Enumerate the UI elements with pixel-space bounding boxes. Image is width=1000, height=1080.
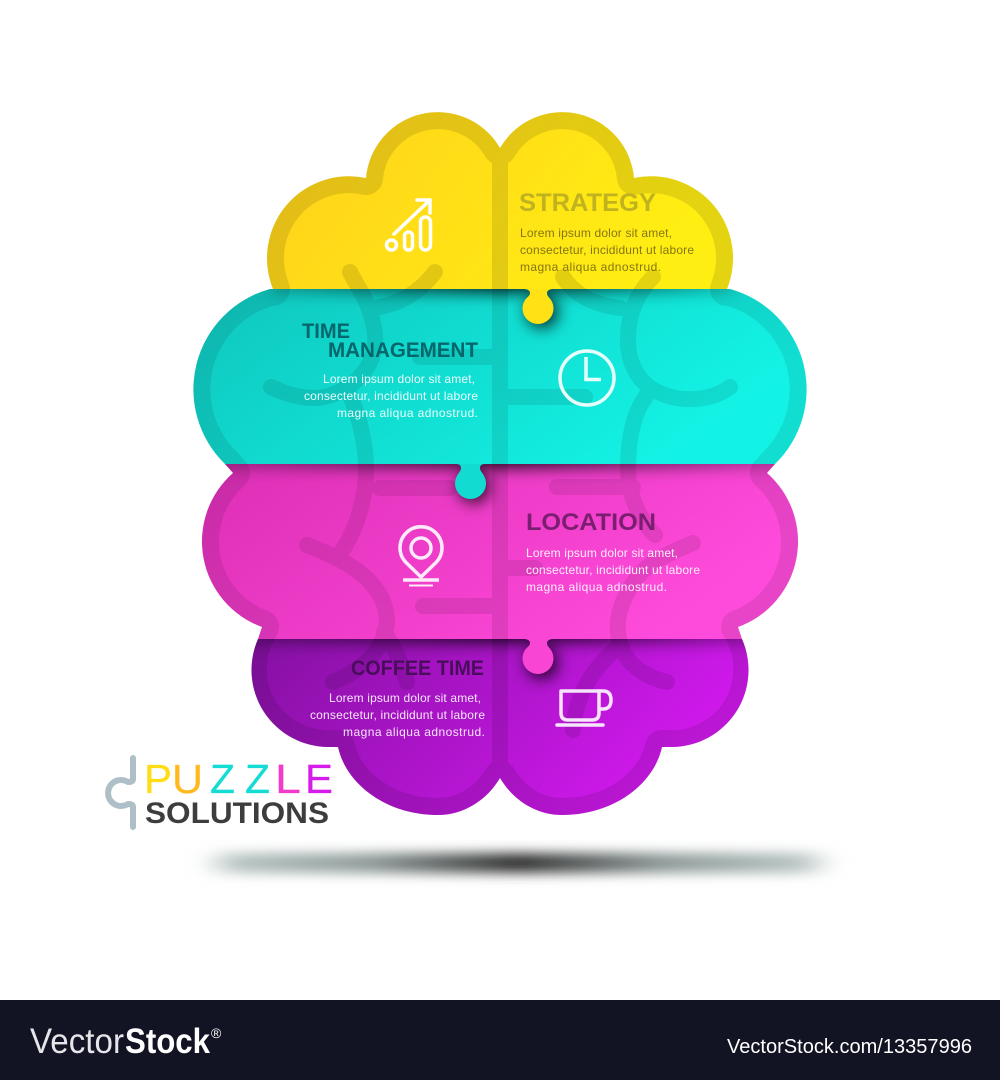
body text: location: consectetur, incididunt ut labore: [526, 563, 700, 577]
icon: map pin: [400, 527, 442, 586]
logo word: puzzle: Z: [210, 756, 235, 802]
body text: strategy: Lorem ipsum dolor sit amet,: [520, 226, 672, 240]
logo word: puzzle: [144, 756, 333, 802]
body text: coffee time: Lorem ipsum dolor sit amet,: [329, 691, 481, 705]
heading: strategy: STRATEGY: [519, 189, 656, 217]
footer image id: VectorStock.com/13357996: [727, 1036, 972, 1058]
logo word: puzzle: P: [144, 756, 172, 802]
footer brand: ®: [211, 1025, 222, 1041]
body text: time management: Lorem ipsum dolor sit amet,: [323, 372, 475, 386]
footer brand: [30, 1022, 222, 1061]
body text: location: magna aliqua adnostrud.: [526, 580, 667, 594]
heading: location: LOCATION: [526, 509, 656, 536]
body text: location: Lorem ipsum dolor sit amet,: [526, 546, 678, 560]
panel: time management (teal): [193, 289, 807, 499]
body text: strategy: [520, 226, 694, 274]
puzzle knob: teal: [455, 464, 486, 499]
icon: growth chart: [386, 200, 430, 250]
logo word: puzzle: U: [172, 756, 203, 802]
ground shadow: [200, 853, 836, 873]
logo icon: puzzle connector: [108, 758, 133, 827]
logo: puzzle solutions: [108, 756, 333, 830]
icon: clock: [560, 351, 614, 405]
heading: time management: TIME: [302, 320, 350, 343]
puzzle knob: magenta: [523, 639, 554, 674]
body text: coffee time: consectetur, incididunt ut labore: [310, 708, 485, 722]
body text: time management: magna aliqua adnostrud.: [337, 406, 478, 420]
footer brand: Stock: [125, 1022, 210, 1061]
heading: time management: MANAGEMENT: [328, 339, 478, 362]
body text: strategy: consectetur, incididunt ut labore: [520, 243, 694, 257]
heading: time management: [302, 320, 478, 362]
shadow cast by teal band: [225, 464, 775, 514]
icon: coffee cup: [557, 691, 611, 725]
shadow cast by yellow band: [267, 289, 738, 339]
body text: coffee time: [310, 691, 485, 739]
body text: location: [526, 546, 700, 594]
heading: coffee time: COFFEE TIME: [351, 657, 484, 680]
body text: coffee time: magna aliqua adnostrud.: [343, 725, 485, 739]
body text: time management: [304, 372, 478, 420]
logo word: solutions: SOLUTIONS: [145, 797, 329, 830]
panel: coffee time (purple): [251, 639, 748, 815]
logo word: puzzle: L: [275, 756, 301, 802]
logo word: puzzle: Z: [245, 756, 270, 802]
footer brand: Vector: [30, 1022, 124, 1061]
panel: strategy (yellow): [267, 112, 733, 324]
panel: location (magenta): [202, 464, 798, 674]
logo word: puzzle: E: [305, 756, 333, 802]
body text: strategy: magna aliqua adnostrud.: [520, 260, 661, 274]
puzzle knob: yellow: [522, 289, 554, 324]
footer bar: [0, 1000, 1000, 1080]
body text: time management: consectetur, incididunt ut labore: [304, 389, 478, 403]
shadow cast by magenta band: [254, 639, 746, 690]
